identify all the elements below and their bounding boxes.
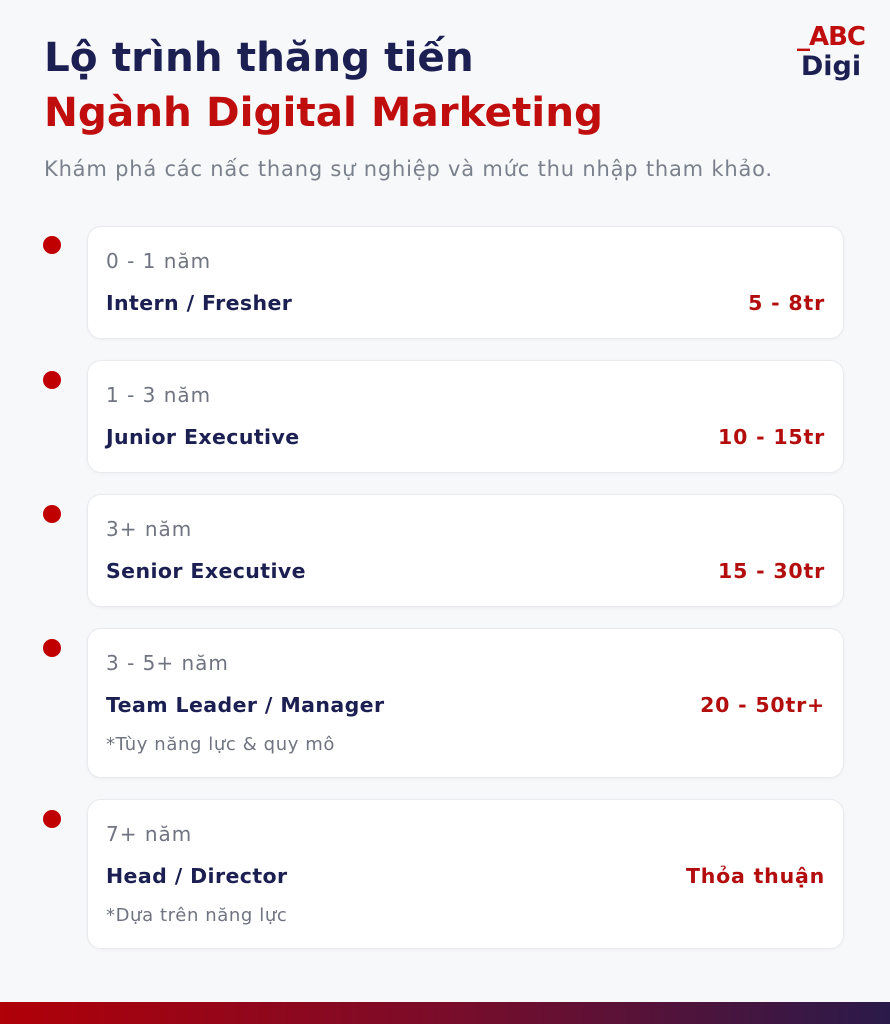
card: senior: 15 - 30tr [718,559,825,583]
card: junior: Junior Executive [106,425,300,449]
card: junior: 10 - 15tr [718,425,825,449]
card: senior: 3+ năm [106,517,192,541]
card: intern: 0 - 1 năm [106,249,211,273]
card: leader: 3 - 5+ năm [106,651,229,675]
title line 1: Lộ trình thăng tiến [44,33,474,81]
card: leader: *Tùy năng lực & quy mô [106,734,335,755]
card: director: 7+ năm [106,822,192,846]
card: director: Head / Director [106,864,288,888]
card: director: Thỏa thuận [686,864,825,888]
card: intern: Intern / Fresher [106,291,292,315]
logo [797,22,865,82]
card: junior: 1 - 3 năm [106,383,211,407]
dot 2 [43,371,61,389]
dot 1 [43,236,61,254]
card: leader [87,628,844,778]
card: intern [87,226,844,339]
card: director [87,799,844,949]
card: leader: 20 - 50tr+ [700,693,825,717]
logo: _ABC [797,22,865,52]
dot 3 [43,505,61,523]
subtitle: Khám phá các nấc thang sự nghiệp và mức thu nhập tham khảo. [44,157,773,181]
dot 4 [43,639,61,657]
dot 5 [43,810,61,828]
card: leader: Team Leader / Manager [106,693,384,717]
card: intern: 5 - 8tr [748,291,825,315]
card: director: *Dựa trên năng lực [106,905,287,926]
card: senior [87,494,844,607]
title line 2: Ngành Digital Marketing [44,88,603,136]
logo: Digi [801,51,861,82]
card: junior [87,360,844,473]
card: senior: Senior Executive [106,559,306,583]
bottom gradient bar [0,1002,890,1024]
